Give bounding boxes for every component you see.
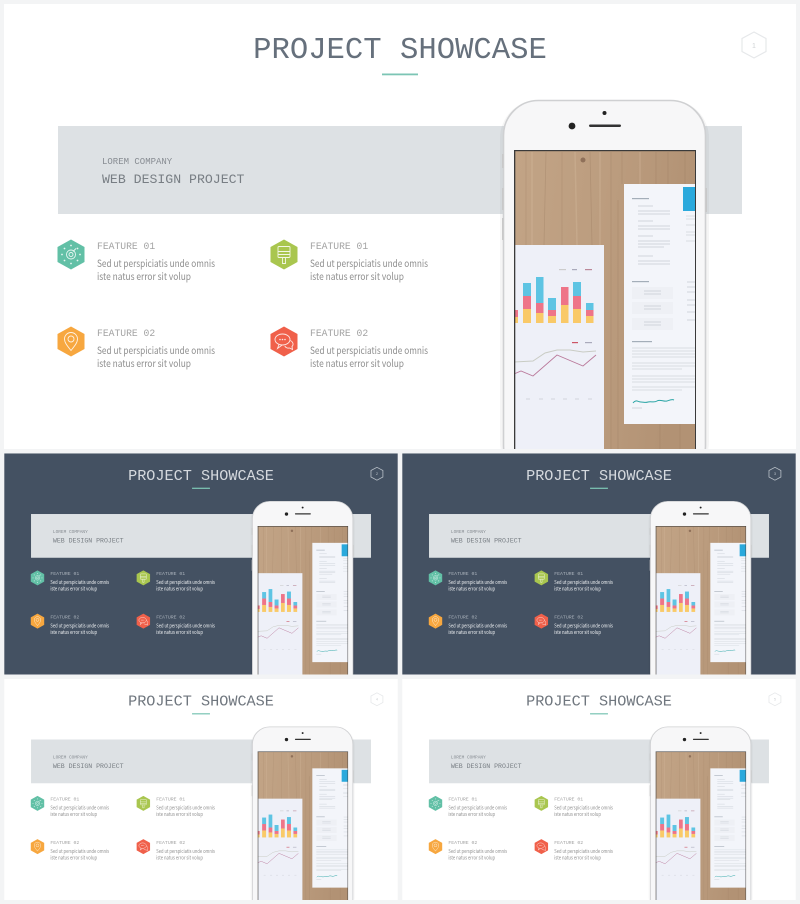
feature: brush: Sed ut perspiciatis unde omnis xyxy=(156,579,215,586)
feature: target: iste natus error sit volup xyxy=(448,811,495,818)
project band xyxy=(31,740,371,783)
feature: location pin: iste natus error sit volup xyxy=(50,854,97,861)
feature: location pin: iste natus error sit volup xyxy=(97,355,191,370)
project band: WEB DESIGN PROJECT xyxy=(451,763,522,770)
page number hexagon xyxy=(769,467,781,480)
feature: target: Sed ut perspiciatis unde omnis xyxy=(448,805,508,812)
project band: LOREM COMPANY xyxy=(102,157,173,167)
page number hexagon xyxy=(742,32,766,58)
feature: brush: iste natus error sit volup xyxy=(554,811,601,818)
page number hexagon xyxy=(371,467,383,480)
phone mockup xyxy=(649,501,753,690)
project band xyxy=(429,740,769,783)
feature: location pin: FEATURE 02 xyxy=(97,328,155,339)
project band: LOREM COMPANY xyxy=(451,754,486,760)
phone mockup xyxy=(251,727,355,904)
panel: white slide right xyxy=(402,679,796,904)
feature: target xyxy=(429,570,508,593)
feature: location pin: iste natus error sit volup xyxy=(50,629,97,636)
feature: brush: Sed ut perspiciatis unde omnis xyxy=(310,255,428,270)
feature: chat xyxy=(535,614,613,636)
feature: target xyxy=(31,570,110,593)
page number hexagon xyxy=(769,693,781,706)
feature: chat xyxy=(137,614,215,636)
title underline xyxy=(192,488,210,489)
feature: location pin: FEATURE 02 xyxy=(50,840,79,846)
feature: chat: FEATURE 02 xyxy=(554,840,583,846)
feature: location pin xyxy=(31,839,110,861)
feature: target: iste natus error sit volup xyxy=(50,586,97,593)
title: PROJECT SHOWCASE xyxy=(128,693,274,711)
feature: chat: Sed ut perspiciatis unde omnis xyxy=(156,848,215,855)
feature: target: FEATURE 01 xyxy=(448,571,477,577)
feature: location pin xyxy=(58,326,215,370)
title underline xyxy=(590,713,608,714)
feature: location pin: iste natus error sit volup xyxy=(448,854,495,861)
project band: WEB DESIGN PROJECT xyxy=(53,537,124,544)
feature: target: FEATURE 01 xyxy=(97,241,155,252)
title underline xyxy=(192,713,210,714)
feature: brush xyxy=(535,796,613,818)
feature: location pin: iste natus error sit volup xyxy=(448,629,495,636)
feature: brush xyxy=(535,570,613,593)
feature: location pin: Sed ut perspiciatis unde omnis xyxy=(448,622,508,629)
page number hexagon: 2 xyxy=(376,471,378,476)
feature: chat: iste natus error sit volup xyxy=(554,854,601,861)
feature: brush: FEATURE 01 xyxy=(156,797,185,803)
feature: location pin: Sed ut perspiciatis unde omnis xyxy=(50,848,110,855)
feature: chat: FEATURE 02 xyxy=(554,614,583,620)
feature: chat: Sed ut perspiciatis unde omnis xyxy=(156,622,215,629)
feature: chat: Sed ut perspiciatis unde omnis xyxy=(554,622,613,629)
phone mockup xyxy=(649,727,753,904)
page number hexagon: 1 xyxy=(752,43,756,50)
feature: chat: Sed ut perspiciatis unde omnis xyxy=(310,342,428,357)
feature: brush: iste natus error sit volup xyxy=(310,268,404,283)
feature: brush xyxy=(137,570,215,593)
feature: location pin: FEATURE 02 xyxy=(448,614,477,620)
feature: target xyxy=(31,796,110,818)
feature: location pin xyxy=(429,614,508,636)
feature: target: Sed ut perspiciatis unde omnis xyxy=(448,579,508,586)
feature: location pin xyxy=(31,614,110,636)
feature: location pin: FEATURE 02 xyxy=(50,614,79,620)
feature: brush: FEATURE 01 xyxy=(310,241,368,252)
feature: chat: iste natus error sit volup xyxy=(156,629,203,636)
feature: chat: Sed ut perspiciatis unde omnis xyxy=(554,848,613,855)
feature: target xyxy=(58,240,215,283)
feature: target: Sed ut perspiciatis unde omnis xyxy=(50,579,110,586)
feature: chat: iste natus error sit volup xyxy=(310,355,404,370)
page number hexagon: 3 xyxy=(774,471,777,476)
page number hexagon: 5 xyxy=(774,697,777,702)
feature: brush: FEATURE 01 xyxy=(554,571,583,577)
project band: LOREM COMPANY xyxy=(53,529,88,535)
project band: WEB DESIGN PROJECT xyxy=(102,172,245,187)
feature: target: iste natus error sit volup xyxy=(97,268,191,283)
feature: chat xyxy=(535,839,613,861)
project band: LOREM COMPANY xyxy=(53,754,88,760)
feature: chat xyxy=(270,326,428,370)
feature: brush: Sed ut perspiciatis unde omnis xyxy=(156,805,215,812)
feature: location pin xyxy=(429,839,508,861)
feature: chat: FEATURE 02 xyxy=(310,328,368,339)
feature: target: Sed ut perspiciatis unde omnis xyxy=(50,805,110,812)
page number hexagon: 4 xyxy=(376,697,379,702)
feature: brush xyxy=(270,240,428,283)
feature: target xyxy=(429,796,508,818)
feature: brush: iste natus error sit volup xyxy=(156,811,203,818)
feature: brush: iste natus error sit volup xyxy=(156,586,203,593)
feature: chat: iste natus error sit volup xyxy=(156,854,203,861)
title underline xyxy=(590,488,608,489)
feature: target: FEATURE 01 xyxy=(50,571,79,577)
title: PROJECT SHOWCASE xyxy=(526,693,672,711)
phone mockup xyxy=(251,501,355,690)
feature: location pin: Sed ut perspiciatis unde omnis xyxy=(448,848,508,855)
feature: chat: FEATURE 02 xyxy=(156,614,185,620)
feature: brush: FEATURE 01 xyxy=(156,571,185,577)
page number hexagon xyxy=(371,693,383,706)
feature: target: FEATURE 01 xyxy=(50,797,79,803)
feature: target: iste natus error sit volup xyxy=(448,586,495,593)
title: PROJECT SHOWCASE xyxy=(253,34,547,68)
panel: white slide left xyxy=(4,679,398,904)
feature: brush: FEATURE 01 xyxy=(554,797,583,803)
feature: target: iste natus error sit volup xyxy=(50,811,97,818)
phone mockup xyxy=(500,100,709,480)
feature: location pin: Sed ut perspiciatis unde omnis xyxy=(50,622,110,629)
project band: WEB DESIGN PROJECT xyxy=(451,537,522,544)
feature: chat: iste natus error sit volup xyxy=(554,629,601,636)
feature: brush: Sed ut perspiciatis unde omnis xyxy=(554,805,613,812)
project band xyxy=(58,126,742,214)
feature: location pin: Sed ut perspiciatis unde omnis xyxy=(97,342,215,357)
feature: location pin: FEATURE 02 xyxy=(448,840,477,846)
panel: dark slide right xyxy=(402,453,796,690)
project band: WEB DESIGN PROJECT xyxy=(53,763,124,770)
project band xyxy=(429,514,769,558)
project band: LOREM COMPANY xyxy=(451,529,486,535)
feature: brush: iste natus error sit volup xyxy=(554,586,601,593)
feature: chat xyxy=(137,839,215,861)
title underline xyxy=(382,74,418,75)
feature: target: FEATURE 01 xyxy=(448,797,477,803)
title: PROJECT SHOWCASE xyxy=(526,467,672,485)
feature: brush: Sed ut perspiciatis unde omnis xyxy=(554,579,613,586)
project band xyxy=(31,514,371,558)
panel: dark slide left xyxy=(4,453,398,690)
feature: brush xyxy=(137,796,215,818)
feature: target: Sed ut perspiciatis unde omnis xyxy=(97,255,215,270)
panel: main white slide xyxy=(4,4,796,480)
title: PROJECT SHOWCASE xyxy=(128,467,274,485)
feature: chat: FEATURE 02 xyxy=(156,840,185,846)
